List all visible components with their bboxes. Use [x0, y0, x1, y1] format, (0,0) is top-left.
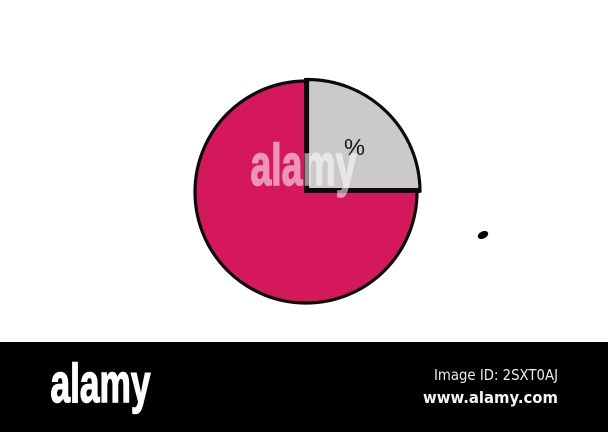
heavy slice edges	[306, 78, 420, 190]
footer logo: alamy: alamy	[50, 352, 151, 414]
watermark: alamy: alamy	[250, 133, 356, 198]
image id: Image ID: 2SXT0AJ	[434, 366, 558, 384]
percent label: %	[344, 134, 365, 160]
pie chart	[195, 78, 420, 303]
black dot	[476, 229, 490, 241]
footer band	[0, 342, 608, 432]
pie slice: crimson three-quarters	[195, 81, 417, 303]
pie slice: grey quarter	[308, 80, 420, 191]
website url: www.alamy.com	[423, 388, 558, 407]
